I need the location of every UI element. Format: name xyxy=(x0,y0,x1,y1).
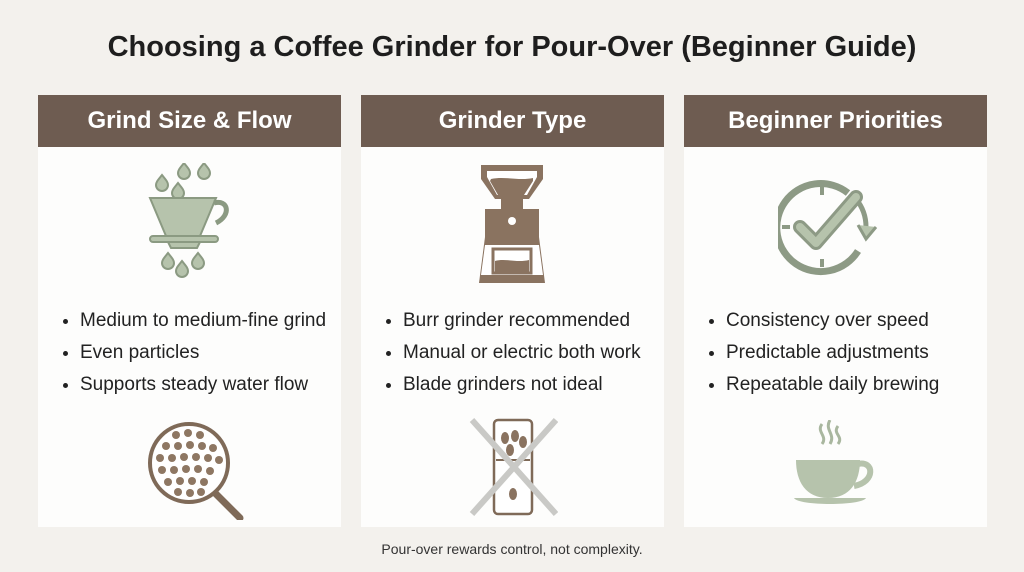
bullets: Supports steady water flow xyxy=(80,374,308,395)
icon: crossed blade grinder xyxy=(470,418,558,516)
panel: grinder type xyxy=(361,95,664,527)
bullets: Burr grinder recommended xyxy=(403,310,630,331)
heading xyxy=(361,95,664,147)
bullets xyxy=(63,310,326,395)
title: Choosing a Coffee Grinder for Pour-Over (Beginner Guide) xyxy=(108,31,916,63)
bullets: Manual or electric both work xyxy=(403,342,641,363)
heading: Grinder Type xyxy=(439,107,586,134)
bullets: Medium to medium-fine grind xyxy=(80,310,326,331)
panel: beginner priorities xyxy=(684,95,987,527)
heading: Beginner Priorities xyxy=(728,107,943,134)
heading xyxy=(38,95,341,147)
heading xyxy=(684,95,987,147)
bullets: Repeatable daily brewing xyxy=(726,374,939,395)
bullets: Consistency over speed xyxy=(726,310,929,331)
icon: burr grinder xyxy=(479,165,545,283)
bullets: Blade grinders not ideal xyxy=(403,374,603,395)
icon: magnifier with particles xyxy=(148,422,244,520)
icon: dripper xyxy=(148,163,229,278)
icon: steaming cup xyxy=(794,420,874,504)
panel: grind size xyxy=(38,95,341,527)
bullets xyxy=(709,310,939,395)
heading: Grind Size & Flow xyxy=(87,107,292,134)
bullets: Predictable adjustments xyxy=(726,342,929,363)
footer: Pour-over rewards control, not complexity. xyxy=(381,541,643,557)
icon: clock check xyxy=(778,180,877,276)
bullets: Even particles xyxy=(80,342,199,363)
bullets xyxy=(386,310,641,395)
